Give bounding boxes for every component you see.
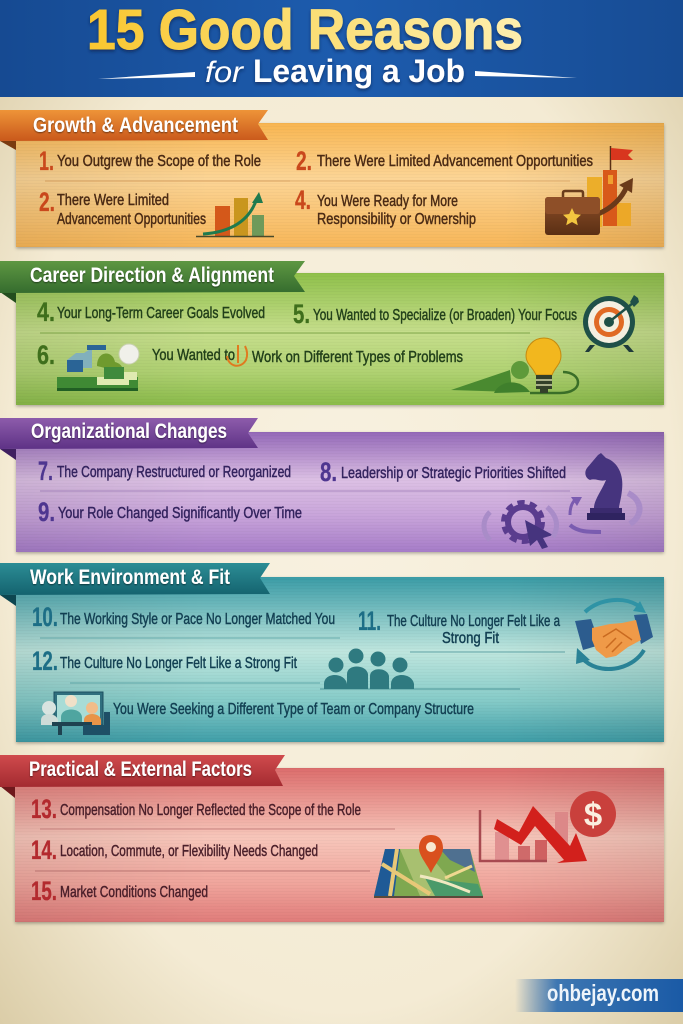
reason 8: Leadership or Strategic Priorities Shifted xyxy=(341,465,566,482)
panel: practical and external factors xyxy=(0,755,664,922)
ribbon: practical and external factors xyxy=(0,755,285,798)
reason: different team or company structure: You Were Seeking a Different Type of Team or Company Structure xyxy=(113,701,474,718)
reason 7 xyxy=(38,456,291,486)
reason 2 repeated: There Were Limited xyxy=(57,192,169,209)
ribbon: growth and advancement xyxy=(0,110,268,150)
ribbon: organizational changes: Organizational Changes xyxy=(31,420,227,443)
reason 13 xyxy=(31,794,361,824)
reason 4: Your Long-Term Career Goals Evolved xyxy=(57,305,265,322)
reason 14 xyxy=(31,835,318,865)
reason 10 xyxy=(32,602,335,632)
reason 7: The Company Restructured or Reorganized xyxy=(57,464,291,481)
subtitle flourish right xyxy=(475,71,577,78)
icon: declining chart with dollar coin xyxy=(480,791,616,863)
reason 4: 4. xyxy=(295,185,311,215)
icon: briefcase with growth bars and flag xyxy=(545,146,633,235)
reason 2 repeated xyxy=(39,187,206,228)
reason 15: Market Conditions Changed xyxy=(60,884,208,901)
reason 15: 15. xyxy=(31,876,57,906)
panel: work environment and fit xyxy=(0,563,664,742)
icon: gear with cursor and arrows xyxy=(484,493,640,549)
reason 4: You Were Ready for More xyxy=(317,193,458,210)
icon: declining chart with dollar coin: $ xyxy=(584,796,602,833)
reason 9: 9. xyxy=(38,497,55,527)
icon: abstract landscape blocks xyxy=(57,344,139,391)
reason 5: You Wanted to Specialize (or Broaden) Your Focus xyxy=(313,307,577,324)
reason 11 xyxy=(358,606,560,647)
reason 6: 6. xyxy=(37,340,55,370)
reason 8: 8. xyxy=(320,457,337,487)
subtitle: Leaving a Job xyxy=(253,53,465,89)
ribbon: career direction and alignment: Career Direction & Alignment xyxy=(30,264,274,287)
reason 8 xyxy=(320,457,566,487)
reason 9 xyxy=(38,497,302,527)
reason 9: Your Role Changed Significantly Over Time xyxy=(58,505,302,522)
reason 13: Compensation No Longer Reflected the Scope of the Role xyxy=(60,802,361,819)
icon: orange hook mark xyxy=(227,345,247,366)
reason 4 xyxy=(37,297,265,327)
reason 11: The Culture No Longer Felt Like a xyxy=(387,613,560,630)
panel: growth and advancement xyxy=(0,110,664,247)
reason 6 xyxy=(37,340,463,370)
panel: career direction and alignment xyxy=(0,261,664,405)
reason 1: 1. xyxy=(39,146,54,176)
panel: organizational changes xyxy=(0,418,664,552)
footer tag: website xyxy=(515,979,683,1012)
reason 12: The Culture No Longer Felt Like a Strong Fit xyxy=(60,655,297,672)
reason 2 xyxy=(296,146,593,176)
reason 14: Location, Commute, or Flexibility Needs Changed xyxy=(60,843,318,860)
icon: map with location pin xyxy=(374,835,483,898)
icon: chess knight xyxy=(585,453,625,520)
reason 2: 2. xyxy=(296,146,312,176)
reason 12 xyxy=(32,646,297,676)
ribbon: growth and advancement: Growth & Advancement xyxy=(33,114,238,137)
reason 2 repeated: 2. xyxy=(39,187,55,217)
icon: group of people xyxy=(324,648,414,689)
icon: rising bar chart xyxy=(196,192,274,236)
icon: light bulb with figure xyxy=(451,338,578,393)
ribbon: career direction and alignment xyxy=(0,261,305,303)
icon: handshake with circular arrows xyxy=(575,600,653,669)
reason 13: 13. xyxy=(31,794,57,824)
reason 10: 10. xyxy=(32,602,58,632)
reason 4 xyxy=(295,185,476,228)
subtitle: for xyxy=(205,56,244,89)
icon: team at video screen xyxy=(41,692,110,735)
reason 6: You Wanted to xyxy=(152,347,235,364)
reason 11: 11. xyxy=(358,606,381,636)
reason 5 xyxy=(293,299,577,329)
footer tag: website: ohbejay.com xyxy=(547,980,659,1006)
reason 6: Work on Different Types of Problems xyxy=(252,349,463,366)
reason 1 xyxy=(39,146,261,176)
reason 5: 5. xyxy=(293,299,310,329)
reason 4: Responsibility or Ownership xyxy=(317,211,476,228)
reason 2 repeated: Advancement Opportunities xyxy=(57,211,206,228)
ribbon: organizational changes xyxy=(0,418,258,460)
reason 1: You Outgrew the Scope of the Role xyxy=(57,153,261,170)
reason 15 xyxy=(31,876,208,906)
reason 4: 4. xyxy=(37,297,55,327)
ribbon: work environment and fit: Work Environment & Fit xyxy=(30,566,230,589)
reason 10: The Working Style or Pace No Longer Matched You xyxy=(60,611,335,628)
subtitle flourish left xyxy=(98,72,195,79)
reason 14: 14. xyxy=(31,835,57,865)
ribbon: work environment and fit xyxy=(0,563,270,606)
ribbon: practical and external factors: Practical & External Factors xyxy=(29,758,252,781)
reason 12: 12. xyxy=(32,646,58,676)
header banner xyxy=(0,0,683,97)
reason 2: There Were Limited Advancement Opportunities xyxy=(317,153,593,170)
reason 7: 7. xyxy=(38,456,53,486)
reason 11: Strong Fit xyxy=(442,630,499,647)
icon: target with arrow xyxy=(583,295,639,352)
